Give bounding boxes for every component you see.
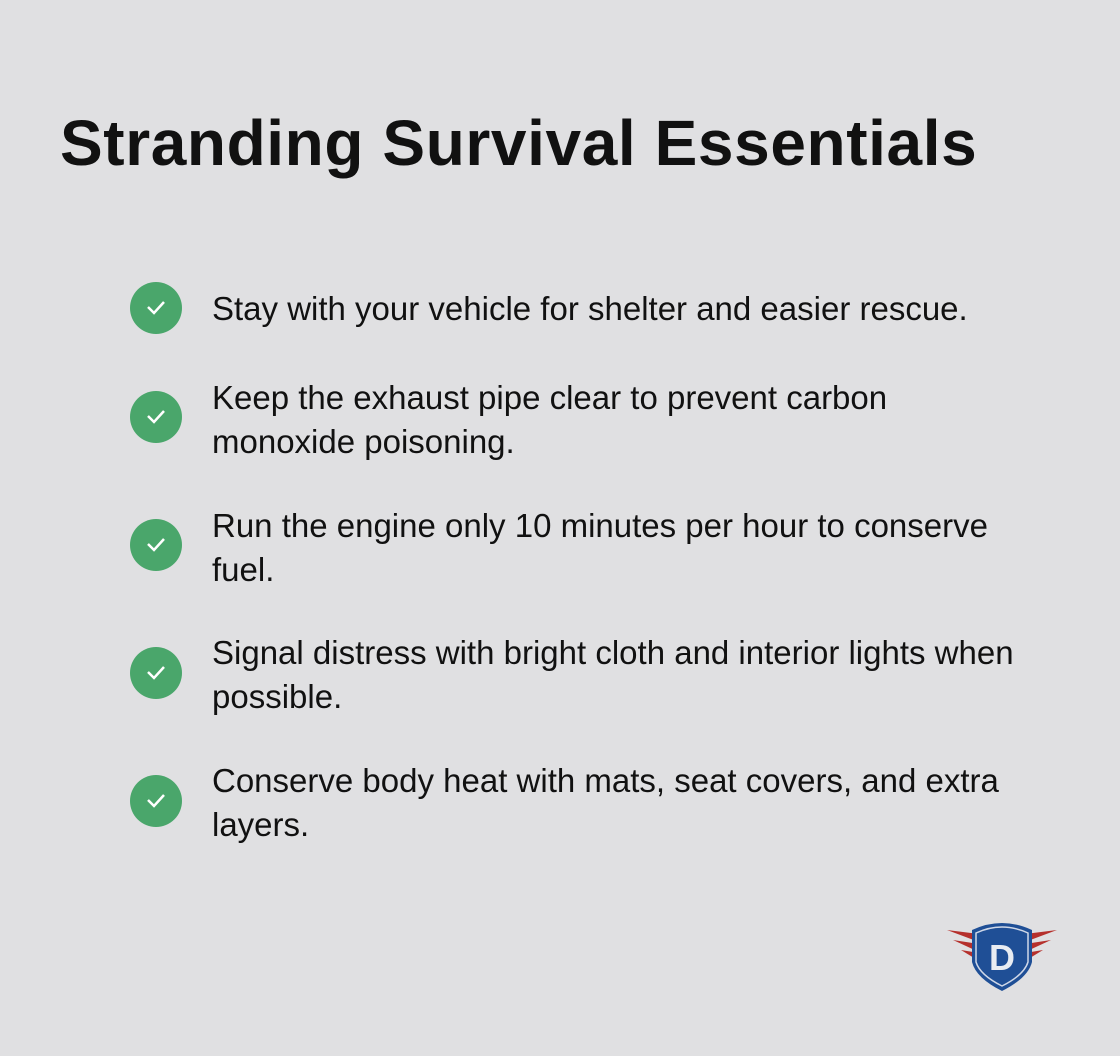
text: Conserve body heat with mats, seat covers, and extra [212,762,999,799]
icon: check [130,647,182,699]
text [212,762,999,843]
text [212,379,887,460]
text: layers. [212,806,309,843]
text [212,507,988,588]
logo [947,923,1057,991]
item 1 [130,282,968,334]
text: possible. [212,678,342,715]
item 4 [130,634,1014,715]
logo: D [989,937,1015,978]
icon: check [130,775,182,827]
text [212,634,1014,715]
text: Stay with your vehicle for shelter and easier rescue. [212,290,968,327]
icon: check [130,282,182,334]
text: Keep the exhaust pipe clear to prevent carbon [212,379,887,416]
title: Stranding Survival Essentials [60,107,977,179]
item 2 [130,379,887,460]
text: Run the engine only 10 minutes per hour to conserve [212,507,988,544]
icon: check [130,391,182,443]
item 5 [130,762,999,843]
item 3 [130,507,988,588]
text: fuel. [212,551,274,588]
icon: check [130,519,182,571]
text: Signal distress with bright cloth and interior lights when [212,634,1014,671]
text: monoxide poisoning. [212,423,515,460]
